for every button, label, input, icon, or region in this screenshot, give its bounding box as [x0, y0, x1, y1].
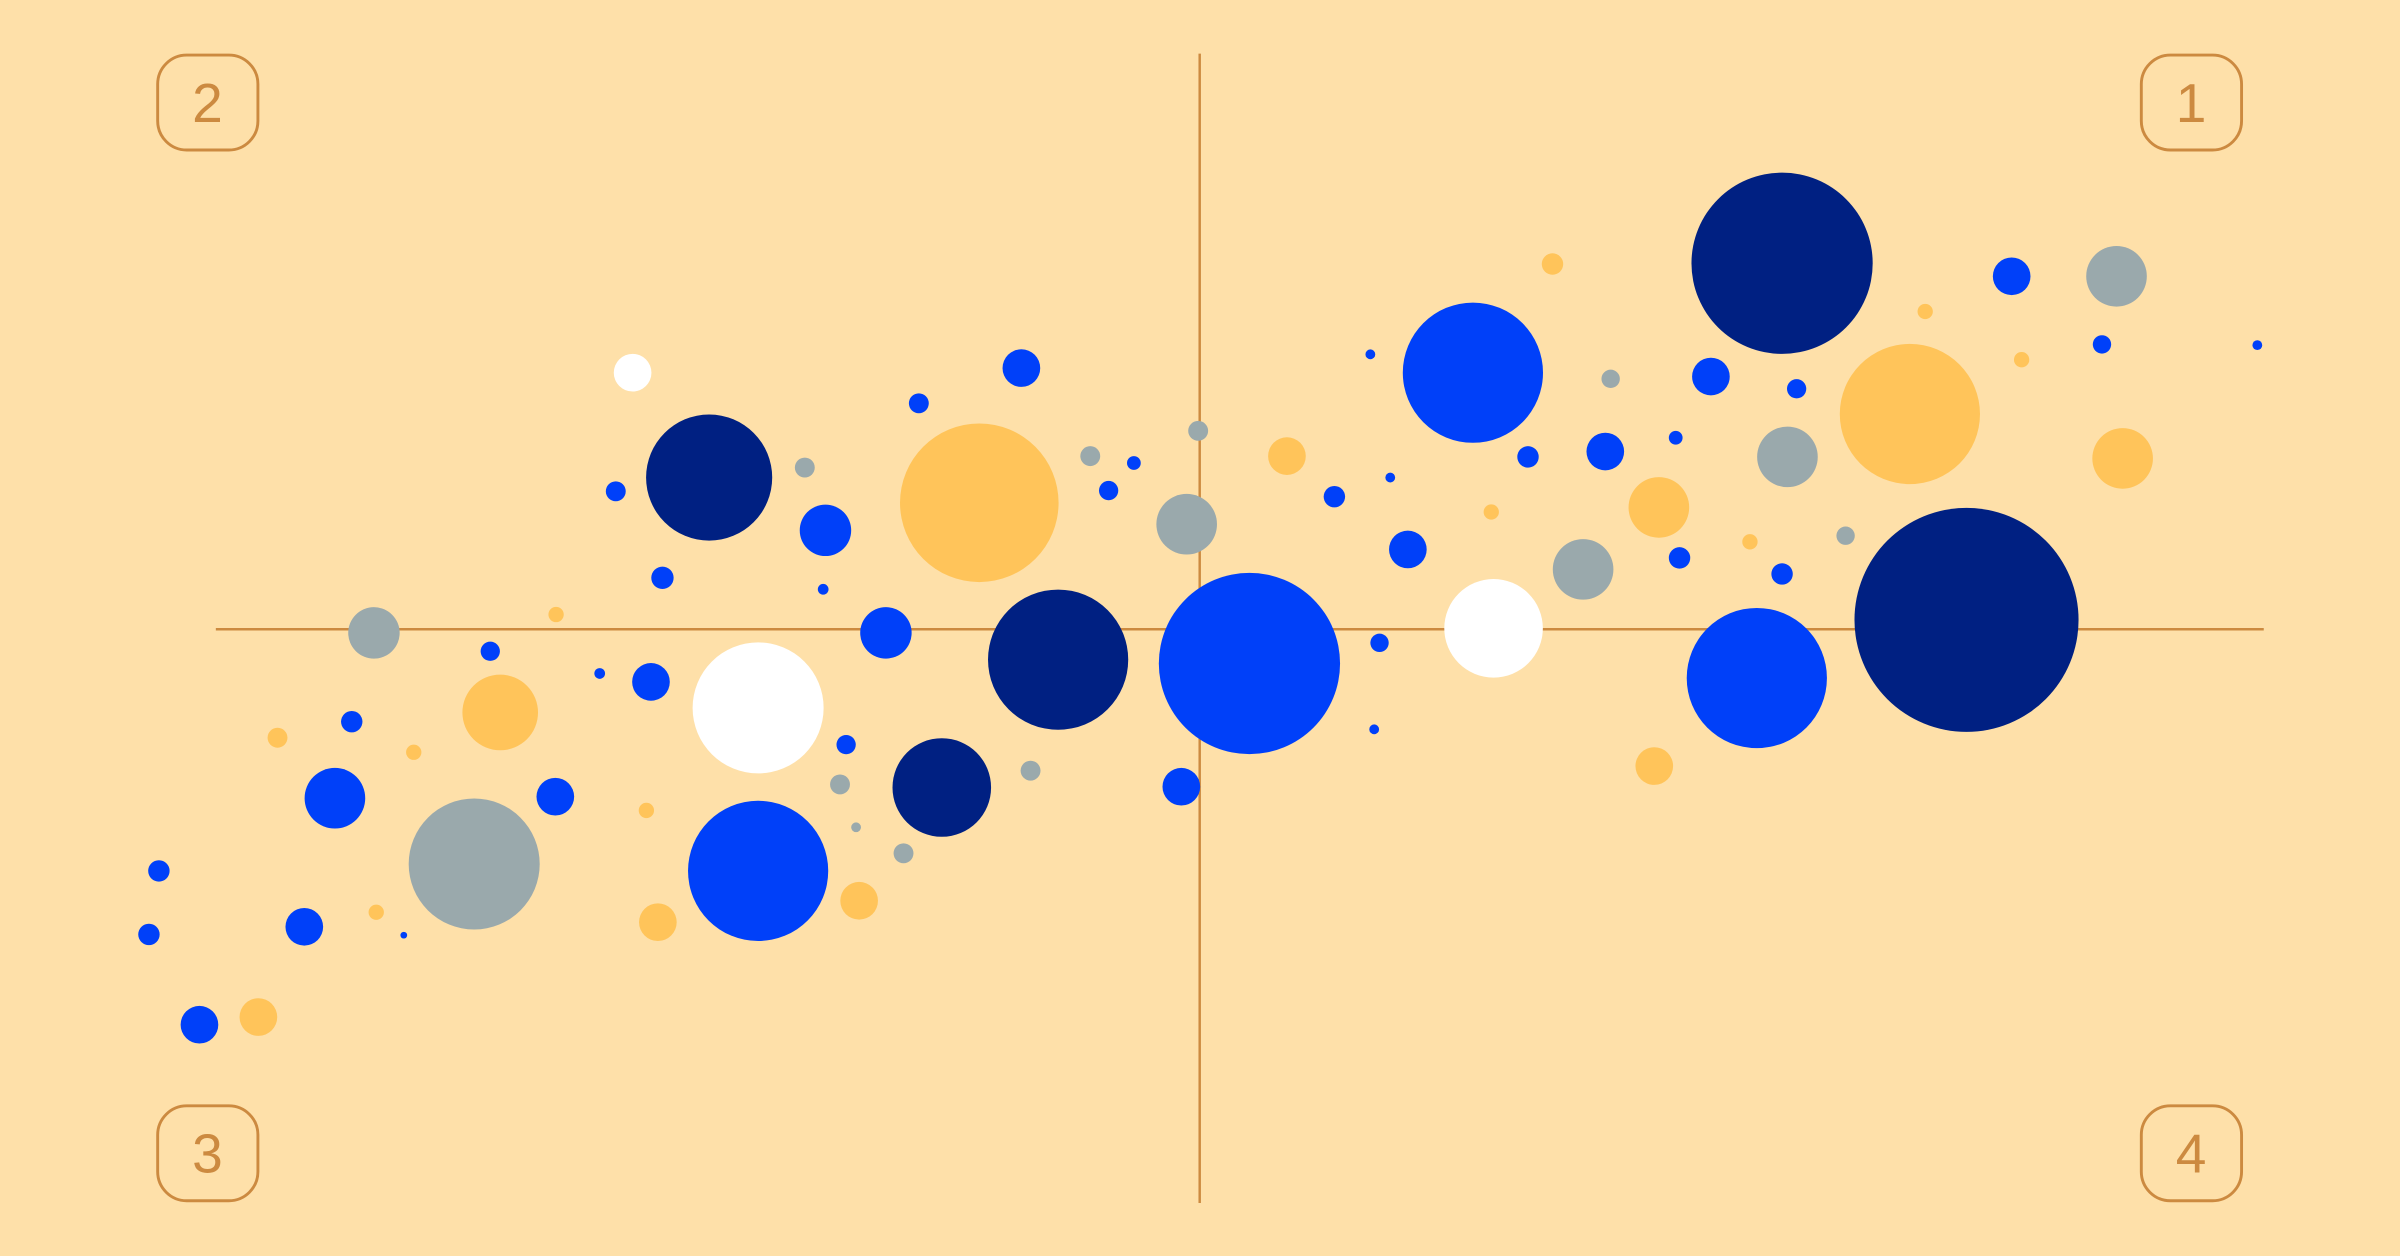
- quadrant badge 1: [2141, 55, 2242, 150]
- quadrant badge 2: [158, 55, 258, 150]
- navy bubbles: [646, 173, 2079, 837]
- quadrant badge 3: 3: [192, 1122, 223, 1184]
- horizontal axis: [216, 628, 2264, 630]
- quadrant badge 4: 4: [2176, 1122, 2206, 1184]
- yellow bubbles: [240, 253, 2153, 1036]
- quadrant badge 2: 2: [192, 72, 223, 134]
- quadrant badge 1: 1: [2176, 72, 2206, 134]
- quadrant badge 4: [2141, 1106, 2242, 1201]
- vertical axis: [1199, 54, 1201, 1203]
- white bubbles: [614, 354, 1543, 773]
- quadrant badge 3: [158, 1106, 258, 1201]
- gray bubbles: [348, 246, 2147, 930]
- bright blue bubbles: [138, 257, 2262, 1044]
